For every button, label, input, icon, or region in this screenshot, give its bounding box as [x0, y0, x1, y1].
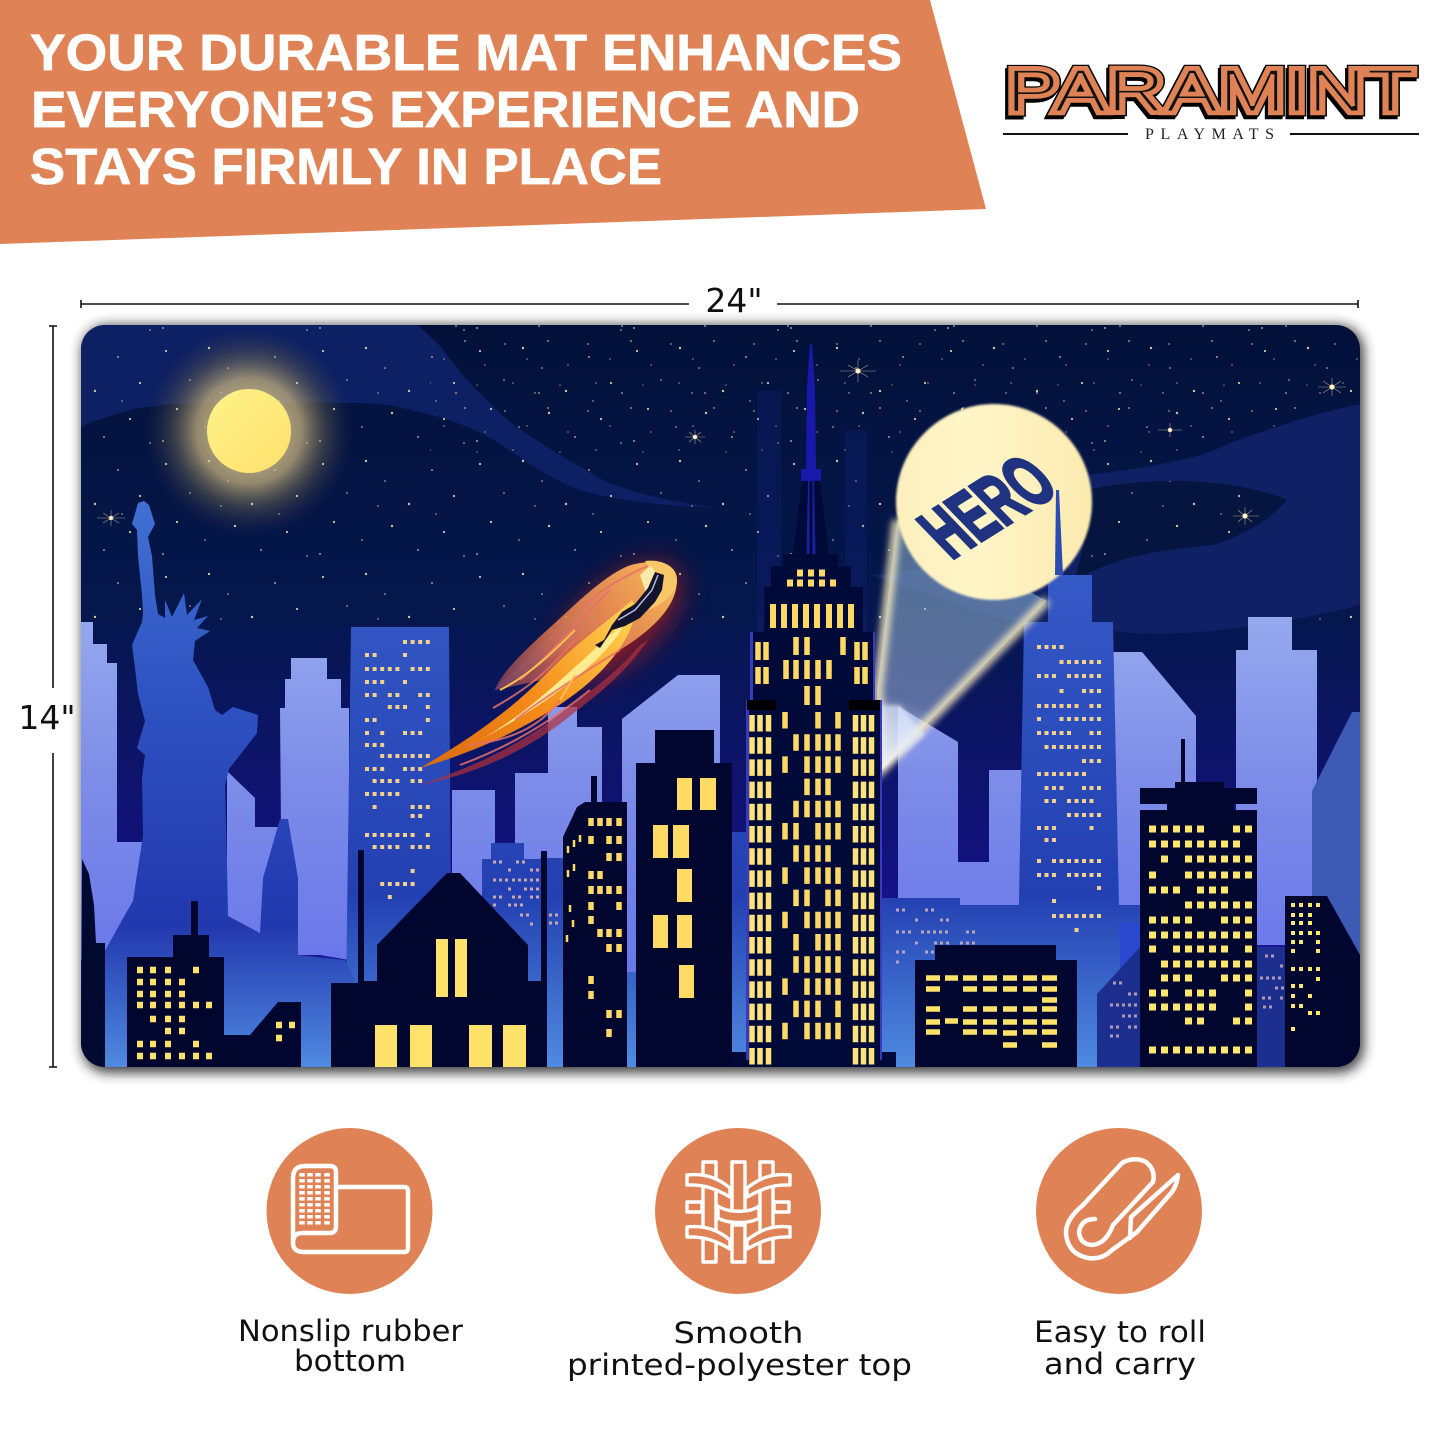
- house-shaped dark building: [331, 850, 547, 1067]
- lower red tail: [420, 640, 648, 785]
- caption: Easy to roll: [1034, 1315, 1206, 1349]
- caption: printed-polyester top: [567, 1348, 912, 1382]
- logo: Paramint Playmats: PARAMINT: [1006, 57, 1415, 126]
- HERO text: HERO: [903, 441, 1073, 572]
- wing windows: [752, 715, 872, 1067]
- light background buildings: [81, 617, 1317, 985]
- moon: [207, 389, 291, 473]
- logo: Paramint Playmats: [1003, 57, 1419, 143]
- dimension: width 24 inches: 24": [705, 281, 763, 320]
- feature: easy to roll and carry: [1034, 1128, 1206, 1381]
- tower with lit windows (left): [346, 627, 451, 970]
- dark building with windows (left): [127, 901, 301, 1067]
- night sky stars: [81, 325, 1360, 625]
- heading text: YOUR DURABLE MAT ENHANCES: [30, 24, 902, 81]
- flying hero figure: [595, 572, 664, 648]
- light beam: [877, 520, 1047, 772]
- feature: nonslip rubber bottom: [238, 1128, 463, 1378]
- dimension: width 24 inches: [81, 281, 1358, 320]
- tower antenna in spot: [1055, 490, 1063, 575]
- mat shadow: [82, 325, 1364, 1073]
- head glow: [645, 560, 677, 610]
- heading text: STAYS FIRMLY IN PLACE: [30, 138, 662, 195]
- logo: Paramint Playmats: PARAMINT: [1006, 57, 1415, 126]
- main flame: [420, 600, 634, 768]
- flame core: [480, 622, 625, 740]
- caption: [1034, 1315, 1206, 1381]
- playmat artwork: [81, 325, 1360, 1067]
- spotlight circle: [896, 404, 1092, 600]
- moon glow: [152, 335, 346, 528]
- dark building far left: [81, 859, 105, 1067]
- small dark building bottom right: [1285, 896, 1360, 1067]
- caption: [567, 1316, 912, 1382]
- icon: woven fabric: [655, 1128, 821, 1294]
- heading text: [30, 24, 902, 195]
- flame body: [495, 562, 677, 690]
- right sky band: [870, 404, 1360, 634]
- caption: [238, 1314, 463, 1378]
- icon: rolled mat: [1036, 1128, 1202, 1294]
- dark tower with many windows: [1140, 739, 1257, 1067]
- logo: Paramint Playmats: PARAMINT: [1004, 60, 1413, 129]
- spotlight beam and HERO signal: [877, 404, 1092, 772]
- vertical light shafts behind tower: [757, 390, 867, 632]
- blue streak: [494, 612, 598, 691]
- logo: Paramint Playmats: PARAMINT: [1006, 57, 1415, 126]
- small blue blocks by dark tower: [1097, 947, 1290, 1067]
- blue building right of spotlight base: [882, 898, 975, 964]
- dark wide building with bar windows: [915, 945, 1077, 1067]
- dark building with large windows: [636, 730, 732, 1067]
- icon: rubber mat: [266, 1128, 432, 1294]
- flaming flying hero comet: [420, 544, 699, 785]
- title banner: [0, 0, 986, 244]
- small dark building with antenna: [563, 776, 627, 1067]
- small blue building with dim windows: [482, 843, 558, 960]
- top windows: [787, 573, 836, 583]
- caption: and carry: [1044, 1347, 1196, 1381]
- tall tower with lit windows (right): [1018, 575, 1120, 978]
- left sky band: [81, 325, 717, 508]
- caption: bottom: [294, 1344, 406, 1378]
- flame streaks: [460, 565, 650, 765]
- blue horizon fill: [540, 832, 1140, 1067]
- centre windows: [785, 712, 838, 1039]
- dimension: height 14 inches: [18, 326, 76, 1067]
- logo: Paramint Playmats: PLAYMATS: [1145, 126, 1274, 143]
- right slanted building: [1312, 712, 1360, 960]
- upper section windows: [758, 637, 865, 705]
- bright sparkle stars: [97, 360, 1346, 526]
- Statue of Liberty silhouette: [105, 501, 357, 1067]
- Empire State style skyscraper: [732, 344, 896, 1067]
- feature: smooth printed polyester top: [567, 1128, 912, 1382]
- heading text: EVERYONE’S EXPERIENCE AND: [31, 81, 860, 138]
- dimension: height 14 inches: 14": [18, 698, 76, 737]
- caption: Nonslip rubber: [238, 1314, 463, 1348]
- caption: Smooth: [674, 1316, 804, 1350]
